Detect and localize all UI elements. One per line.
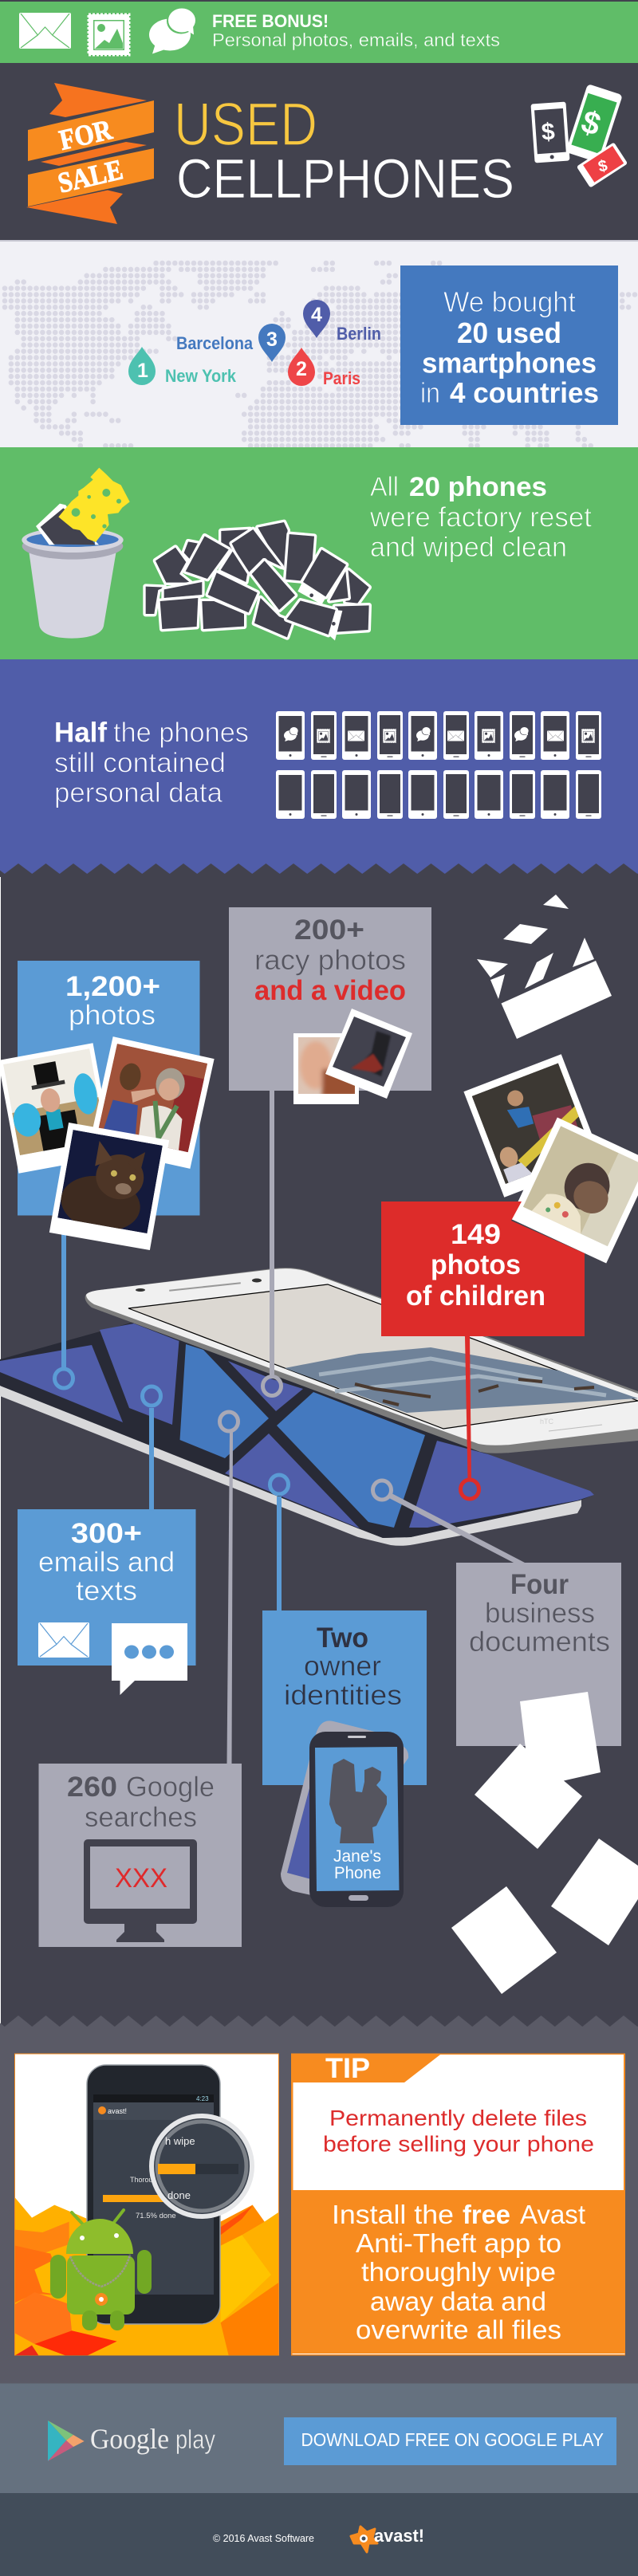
callout: we bought xyxy=(400,265,618,425)
panel: four business documents: Four xyxy=(510,1569,569,1600)
map pin: Barcelona xyxy=(176,324,286,362)
panel: 260 google searches xyxy=(38,1764,242,1947)
callout: we bought: 4 countries xyxy=(450,376,599,409)
button: download: DOWNLOAD FREE ON GOOGLE PLAY xyxy=(301,2429,604,2450)
text: half the phones: the phones xyxy=(113,718,249,748)
panel: 260 google searches: Google xyxy=(126,1772,215,1803)
panel: four business documents: documents xyxy=(469,1626,610,1658)
photo: cat xyxy=(49,1123,169,1250)
icon: bucket with phone and sponge xyxy=(22,468,130,639)
magnifier: h wipe xyxy=(165,2135,195,2147)
panel: free bonus banner xyxy=(0,2,638,63)
icon: chat bubbles xyxy=(149,8,195,54)
connector: photos xyxy=(54,1215,73,1388)
ribbon: for sale xyxy=(26,83,154,224)
callout: we bought: in xyxy=(420,376,440,409)
panel: racy photos xyxy=(229,907,431,1104)
phone with avast app: avast! xyxy=(108,2107,127,2115)
map pin: Berlin: 4 xyxy=(311,304,322,326)
icon: phones with owner silhouette: Jane's xyxy=(333,1847,381,1866)
ribbon: for sale: SALE xyxy=(55,153,126,199)
tab: tip: TIP xyxy=(325,2053,370,2084)
photo: man in top hat xyxy=(0,1043,114,1174)
icon: mail xyxy=(38,1622,89,1658)
icon: play triangle xyxy=(48,2421,85,2461)
panel: 149 photos of children xyxy=(381,1201,585,1336)
tab: tip xyxy=(291,2053,442,2084)
panel: 260 google searches: 260 xyxy=(67,1772,117,1803)
map pin: Barcelona: 3 xyxy=(266,328,278,351)
magnifier: done xyxy=(167,2189,191,2201)
text: half the phones: Half xyxy=(54,718,107,748)
logo text: google play: play xyxy=(175,2425,215,2454)
icon: phones with owner silhouette: Phone xyxy=(334,1864,381,1882)
text: install avast anti-theft: Install the xyxy=(332,2200,454,2229)
phone with avast app: 4:23 xyxy=(196,2095,209,2102)
title: used: USED xyxy=(174,91,317,159)
callout: we bought: smartphones xyxy=(422,346,597,380)
panel: 149 photos of children: photos xyxy=(431,1249,521,1280)
logo text: google play: Google xyxy=(90,2423,169,2455)
panel: racy photos: 200+ xyxy=(294,914,364,946)
connector: emails xyxy=(142,1386,161,1510)
text: install avast anti-theft: thoroughly wipe xyxy=(361,2257,556,2287)
panel: 1,200+ photos: photos xyxy=(69,1000,156,1031)
photo: blurred woman xyxy=(325,1009,412,1099)
panel: 300+ emails and texts: texts xyxy=(76,1575,137,1607)
panel: google play xyxy=(0,2384,638,2493)
android mascot xyxy=(50,2210,152,2330)
map pin: Paris: 2 xyxy=(296,358,307,380)
icon: message bubble xyxy=(112,1623,187,1695)
heading: free bonus: FREE BONUS! xyxy=(212,11,329,31)
tablet tray with mosaic panels xyxy=(0,1322,594,1546)
photo: blurred couple xyxy=(293,1033,359,1104)
photo: girl and grandmother xyxy=(89,1036,215,1169)
panel: title header xyxy=(0,63,638,241)
map pin: Paris: Paris xyxy=(323,368,360,388)
connector: identities xyxy=(270,1475,289,1610)
text: half the phones: personal data xyxy=(54,777,223,808)
panel: 300+ emails and texts: emails and xyxy=(38,1547,175,1578)
map pin: Barcelona: Barcelona xyxy=(176,333,254,353)
button: download xyxy=(284,2417,616,2465)
phone with avast app: 71.5% done xyxy=(136,2212,176,2220)
panel: two owner identities: identities xyxy=(284,1680,402,1711)
icon: phones with dollar signs: $ xyxy=(577,104,605,143)
text: half the phones xyxy=(54,718,249,808)
panel: two owner identities: Two xyxy=(317,1622,368,1654)
large phone xyxy=(85,1268,638,1453)
phone with avast app: Thoroug xyxy=(130,2176,157,2184)
magnifier xyxy=(152,2116,252,2216)
map pin: New York xyxy=(128,347,237,386)
logo text: google play xyxy=(90,2423,215,2455)
text: all 20 phones: and wiped clean xyxy=(370,532,567,563)
icon: pile of phones xyxy=(146,522,369,640)
map pin: Berlin xyxy=(303,300,381,344)
panel: four business documents xyxy=(451,1563,638,1994)
large phone: hTC xyxy=(540,1418,554,1426)
panel: 300+ emails and texts: 300+ xyxy=(71,1518,142,1549)
icons: clean phones xyxy=(276,770,601,819)
panel: footer xyxy=(0,2493,638,2576)
logo: avast xyxy=(351,2526,424,2552)
text: permanently delete files xyxy=(323,2106,594,2157)
panel: 149 photos of children: 149 xyxy=(451,1219,501,1250)
panel: 300+ emails and texts xyxy=(18,1509,196,1695)
title: cellphones: CELLPHONES xyxy=(176,147,514,210)
panel: app screenshot xyxy=(14,2054,279,2355)
text: bonus description: Personal photos, emails, and texts xyxy=(212,29,500,50)
icons: phones containing data xyxy=(276,711,601,760)
photo: baby xyxy=(510,1117,638,1264)
panel: racy photos: racy photos xyxy=(254,945,406,976)
text: all 20 phones: 20 phones xyxy=(409,472,547,502)
panel: tip xyxy=(291,2053,625,2355)
panel: four business documents: business xyxy=(485,1598,595,1629)
panel: factory reset xyxy=(0,447,638,659)
map pin: Paris xyxy=(288,348,360,388)
text: install avast anti-theft: Anti-Theft app to xyxy=(356,2228,561,2258)
world map dots xyxy=(5,263,635,446)
panel: children photos group xyxy=(463,1054,638,1264)
panel: two owner identities xyxy=(262,1610,427,1907)
phone with avast app xyxy=(87,2065,220,2324)
icon: monitor with xxx: XXX xyxy=(115,1863,167,1894)
text: copyright: © 2016 Avast Software xyxy=(213,2532,314,2544)
icon: stamp photo xyxy=(89,14,129,55)
text: install avast anti-theft xyxy=(332,2200,585,2345)
text: install avast anti-theft: away data and xyxy=(370,2287,546,2316)
panel: map of countries xyxy=(0,240,638,447)
icon: phones with dollar signs xyxy=(530,84,628,188)
connector: documents xyxy=(373,1481,525,1563)
connector: racy photos xyxy=(263,1091,281,1395)
panel: 1,200+ photos xyxy=(0,961,215,1250)
text: install avast anti-theft: Avast xyxy=(520,2200,585,2229)
text: all 20 phones: were factory reset xyxy=(369,502,592,533)
section: tip background xyxy=(0,2016,638,2384)
callout: we bought: 20 used xyxy=(457,317,561,349)
text: install avast anti-theft: free xyxy=(463,2200,510,2229)
map pin: New York: New York xyxy=(165,366,237,386)
ribbon: for sale: FOR xyxy=(57,113,116,156)
connector: searches xyxy=(220,1412,238,1764)
icon: monitor with xxx xyxy=(84,1839,197,1942)
panel: half the phones xyxy=(0,659,638,879)
connector: children xyxy=(461,1336,478,1499)
panel: racy photos: and a video xyxy=(254,975,406,1006)
text: half the phones: still contained xyxy=(54,747,226,778)
panel: two owner identities: owner xyxy=(304,1651,381,1682)
icon: phones with owner silhouette xyxy=(281,1721,408,1907)
logo: avast: avast! xyxy=(374,2526,424,2546)
map pin: Berlin: Berlin xyxy=(337,324,381,344)
text: permanently delete files: Permanently delete files xyxy=(329,2106,587,2130)
icon: phones with dollar signs: $ xyxy=(541,119,556,146)
background: orange polygons xyxy=(15,2198,278,2355)
panel: 149 photos of children: of children xyxy=(406,1280,545,1312)
panel: 1,200+ photos: 1,200+ xyxy=(65,971,160,1002)
map pin: New York: 1 xyxy=(137,360,148,382)
icon: phones with dollar signs: $ xyxy=(597,157,609,176)
icon: mail xyxy=(19,13,71,49)
icon: scattered documents xyxy=(451,1692,638,1994)
photo: kids playing xyxy=(463,1054,602,1198)
text: all 20 phones: All xyxy=(370,472,399,502)
text: all 20 phones xyxy=(369,472,592,563)
callout: we bought: We bought xyxy=(443,285,576,318)
text: install avast anti-theft: overwrite all files xyxy=(356,2315,561,2345)
text: permanently delete files: before selling your phone xyxy=(323,2132,594,2157)
panel: 260 google searches: searches xyxy=(85,1802,197,1833)
icon: exploding clapperboard xyxy=(477,895,612,1039)
